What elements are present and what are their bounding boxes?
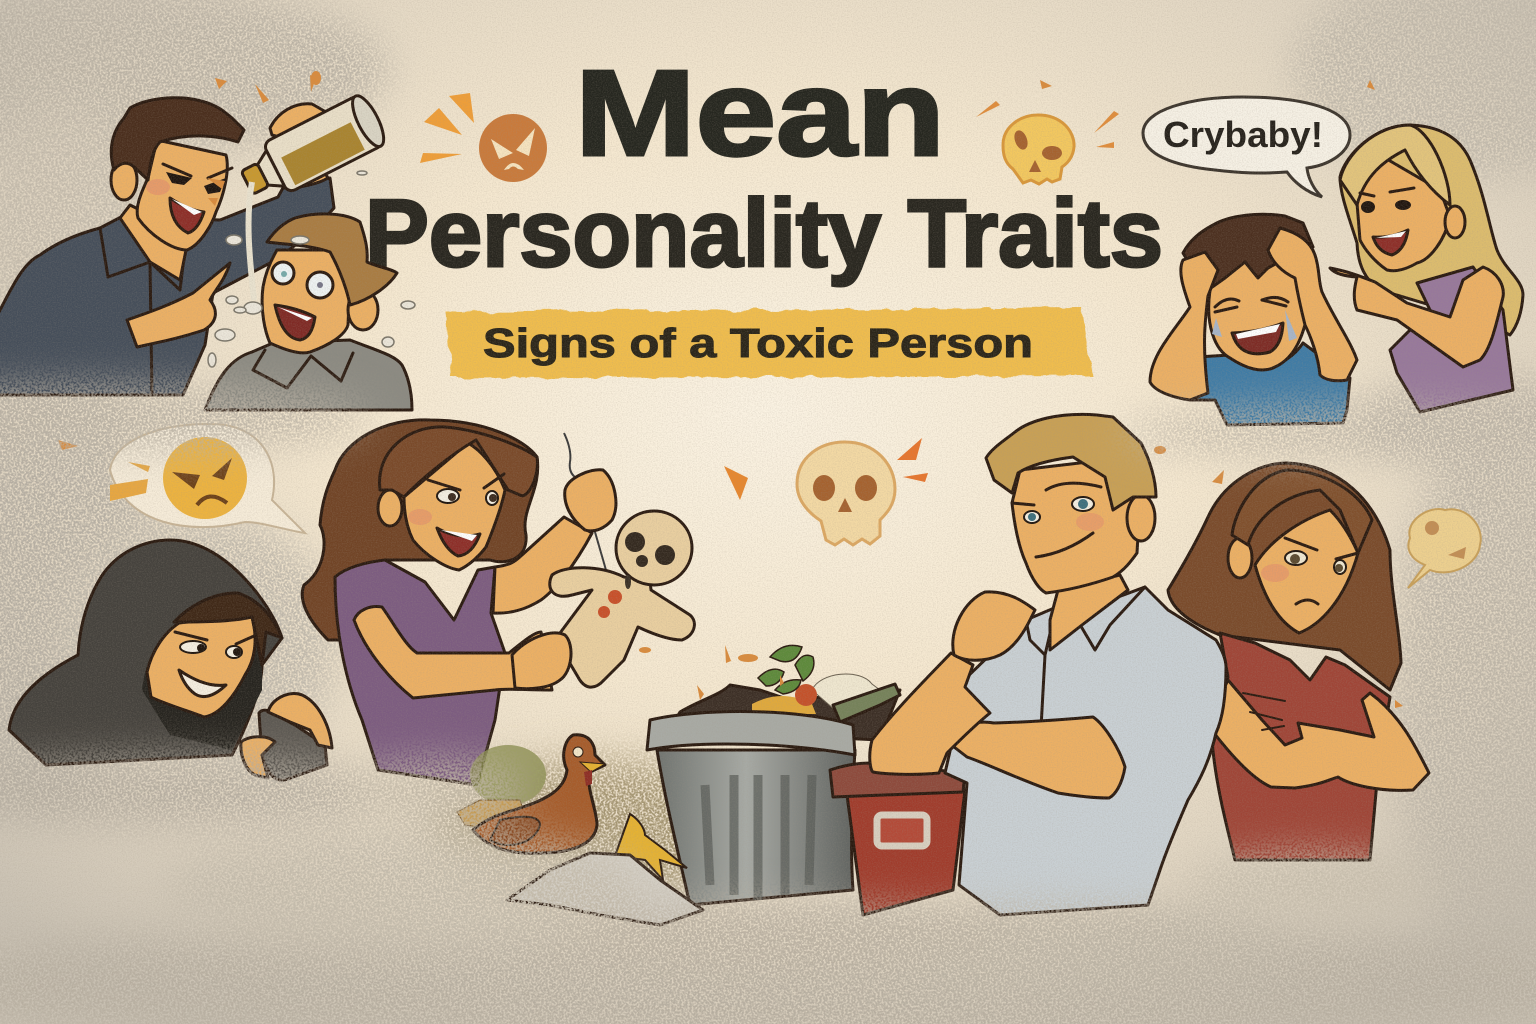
victim eyes and mouth — [272, 262, 294, 284]
speech bubble: Crybaby!: Crybaby! — [1163, 114, 1323, 155]
raised arm — [493, 517, 592, 613]
icon: skull top — [976, 101, 1119, 184]
purple shirt — [335, 560, 505, 785]
woman fringe — [1340, 125, 1450, 205]
crying boy head — [1209, 260, 1310, 370]
hooded face — [147, 617, 255, 717]
title line: Personality Traits: Personality Traits — [365, 180, 1163, 287]
blond man shirt — [945, 587, 1226, 915]
woman eyes and mouth — [1361, 201, 1375, 213]
crumpled paper — [507, 853, 703, 925]
crying boy shirt — [1190, 343, 1350, 425]
woman face — [1255, 510, 1358, 633]
phone hands — [268, 694, 332, 748]
yellow brush stroke — [446, 308, 1092, 378]
bully hair — [111, 98, 244, 180]
phone — [259, 710, 327, 780]
neck and face — [404, 443, 505, 570]
crying boy left arm — [1150, 252, 1218, 400]
figure fade: speckled dust over the lower edges of figures — [0, 386, 1536, 985]
crying boy face — [1215, 297, 1288, 307]
bully eyes and mouth — [166, 172, 226, 194]
red bin — [847, 790, 965, 915]
pointing hand — [127, 263, 230, 347]
spilled salt — [208, 171, 415, 367]
icon: angry face top — [420, 93, 547, 182]
victim body — [205, 340, 412, 410]
grey trash can — [657, 750, 855, 905]
blond man eyes and smirk — [1024, 511, 1040, 523]
chicken feet — [615, 814, 687, 880]
blond man raised arm — [870, 653, 990, 774]
scene: hooded figure with phone — [9, 540, 332, 780]
icon: angry emoji bubble — [110, 424, 305, 533]
crying boy hair — [1183, 214, 1313, 290]
voodoo doll — [550, 511, 694, 687]
subtitle banner — [446, 308, 1092, 378]
woman red top — [1212, 633, 1390, 860]
eyes and mouth — [437, 489, 459, 503]
raised wrist — [283, 168, 328, 188]
hooded hair — [174, 593, 282, 665]
needle and fist — [564, 433, 608, 577]
moss patch — [470, 745, 546, 805]
lower hand — [512, 633, 571, 689]
victim head — [262, 250, 350, 353]
title line: Mean: Mean — [575, 45, 945, 181]
icon: skull centre — [724, 438, 928, 545]
hair back — [302, 420, 538, 640]
garbage pile — [670, 645, 900, 740]
scene: Crybaby! taunt — [1143, 97, 1523, 425]
skull puff — [1408, 509, 1481, 588]
woman arms — [1214, 680, 1429, 790]
blond man neck — [1050, 575, 1128, 650]
speech bubble: Crybaby! — [1143, 97, 1350, 197]
victim hair — [267, 214, 397, 305]
fringe — [380, 427, 537, 497]
scene: trash cans and chicken — [457, 645, 965, 925]
woman eyes and mouth — [1285, 551, 1307, 565]
chicken — [457, 735, 605, 853]
salt bottle — [234, 92, 390, 208]
confetti specks — [58, 71, 1403, 708]
subtitle: Signs of a Toxic Person — [483, 320, 1033, 366]
blond man arm front — [945, 717, 1125, 798]
near arm — [354, 607, 552, 698]
crying boy right arm — [1268, 228, 1357, 381]
woman hair — [1168, 463, 1401, 690]
woman fingers — [1243, 693, 1285, 730]
bully neck and head — [111, 98, 244, 280]
title — [365, 45, 1163, 287]
woman face — [1357, 158, 1450, 271]
hooded eyes and smile — [180, 641, 206, 653]
woman arm pointing — [1330, 267, 1503, 367]
woman fringe — [1232, 470, 1372, 553]
hood and body — [9, 540, 282, 765]
blond man fist — [953, 592, 1035, 660]
blond man hair — [986, 414, 1156, 510]
bully body and shirt — [0, 178, 334, 395]
blond man face — [1012, 460, 1140, 593]
hood shade — [142, 603, 262, 750]
scene: man pouring salt on victim — [0, 92, 415, 410]
scene: smug blond man and sulking woman — [870, 414, 1481, 915]
can rim — [647, 712, 855, 755]
blonde hair back — [1340, 125, 1523, 335]
salt stream — [248, 182, 254, 300]
top hand — [270, 104, 326, 140]
scene: woman with voodoo doll — [302, 420, 694, 785]
blonde woman torso — [1390, 267, 1513, 412]
